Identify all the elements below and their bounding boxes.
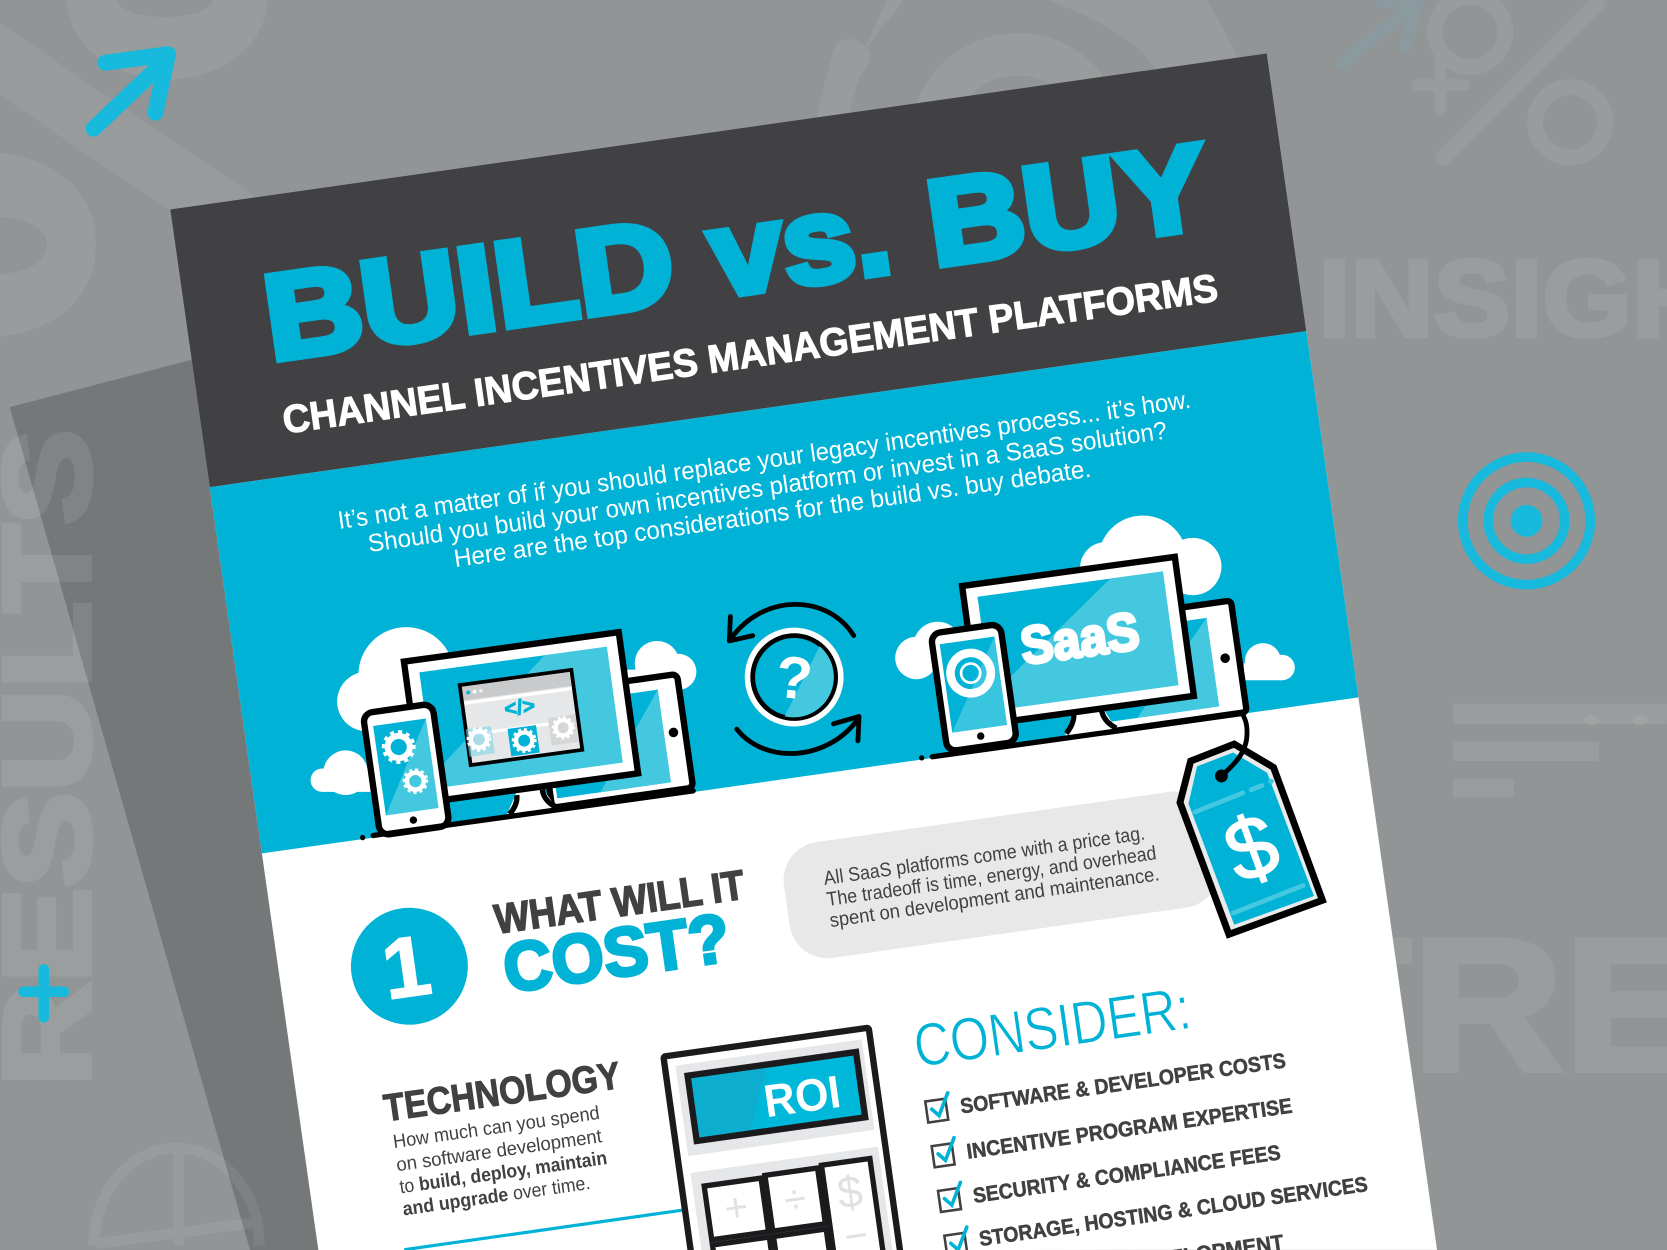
ring logo	[948, 650, 993, 696]
watermark: dial centre ring	[931, 54, 1103, 226]
intro text: It’s not a matter of if you should replace your legacy incentives process... it’s how.	[336, 386, 1192, 535]
watermark: ring top left	[67, 0, 267, 80]
shadow page	[10, 359, 330, 1250]
icon: blue target	[1463, 457, 1590, 585]
subtitle: CHANNEL INCENTIVES MANAGEMENT PLATFORMS	[280, 266, 1221, 442]
calculator display	[688, 1052, 865, 1141]
watermark: dial strap top centre	[813, 0, 904, 138]
button symbols	[721, 1167, 872, 1250]
calculator buttons	[704, 1158, 897, 1250]
title	[256, 117, 1217, 386]
icon: price tag	[1180, 712, 1322, 934]
number badge	[343, 900, 476, 1032]
watermark: large O left	[0, 152, 96, 338]
illustration: right tablet	[1086, 600, 1247, 733]
panel: infographic page	[170, 53, 1437, 1250]
illustration: left monitor	[404, 632, 638, 803]
divider line	[404, 1210, 683, 1250]
checklist: STORAGE, HOSTING & CLOUD SERVICES	[978, 1172, 1369, 1250]
watermark: percent icon	[1417, 0, 1605, 157]
checklist: SOFTWARE & DEVELOPER COSTS	[959, 1048, 1287, 1118]
callout text	[822, 821, 1161, 932]
technology text: How much can you spend	[392, 1103, 601, 1153]
technology text: to build, deploy, maintain	[398, 1148, 608, 1198]
watermark: text lines	[1453, 704, 1667, 797]
illustration: right phone	[931, 624, 1017, 752]
callout bubble	[779, 786, 1224, 963]
watermark: TRENDS: TRE	[1283, 900, 1667, 1111]
title: BUY	[919, 117, 1217, 292]
button symbols: ÷	[781, 1175, 809, 1223]
blue band	[210, 331, 1358, 853]
intro text: Here are the top considerations for the build vs. buy debate.	[452, 455, 1093, 573]
illustration: left ground line	[360, 791, 693, 840]
code window: </>	[503, 693, 536, 721]
callout text: All SaaS platforms come with a price tag.	[822, 822, 1146, 890]
button symbols: $	[834, 1167, 866, 1219]
intro text: Should you build your own incentives platform or invest in a SaaS solution?	[366, 417, 1169, 558]
checklist: INCENTIVE PROGRAM EXPERTISE	[965, 1094, 1294, 1164]
illustration: left phone	[363, 704, 450, 836]
page sheet	[170, 53, 1437, 1250]
technology text: on software development	[395, 1126, 604, 1176]
watermark: faint arrow	[1342, 0, 1418, 64]
illustration: ROI calculator	[663, 1028, 913, 1250]
icon: question mark	[748, 631, 840, 723]
intro text	[336, 386, 1200, 589]
heading: what will it cost	[491, 861, 757, 1008]
arrow: top rotate	[729, 604, 854, 641]
arrow: bottom rotate	[737, 716, 859, 754]
calculator display: ROI	[761, 1066, 844, 1127]
code window	[460, 670, 582, 765]
icon: question mark: ?	[773, 643, 816, 713]
heading: technology: TECHNOLOGY	[381, 1054, 623, 1130]
title: vs.	[701, 163, 899, 323]
heading: what will it cost: COST?	[498, 898, 734, 1007]
illustration: left clouds	[311, 627, 696, 795]
illustration: right clouds	[895, 516, 1295, 680]
icon: blue plus	[24, 969, 64, 1017]
check boxes	[925, 1093, 971, 1250]
illustration: right monitor	[962, 557, 1194, 725]
icon: price tag: $	[1212, 795, 1291, 902]
illustration: right monitor stand	[1065, 706, 1116, 736]
background diagonal band	[0, 23, 255, 210]
SaaS label: SaaS	[1017, 602, 1143, 676]
illustration: right ground line	[919, 713, 1244, 761]
checklist	[959, 1039, 1376, 1250]
icon: blue arrow	[94, 54, 168, 129]
heading: what will it cost: WHAT WILL IT	[491, 861, 747, 943]
illustration: left monitor stand	[506, 788, 557, 816]
watermark: pie chart	[94, 1148, 260, 1246]
callout text: spent on development and maintenance.	[828, 863, 1161, 932]
number badge: 1	[376, 918, 437, 1018]
checklist: SECURITY & COMPLIANCE FEES	[971, 1140, 1282, 1208]
callout text: The tradeoff is time, energy, and overhead	[825, 842, 1158, 911]
technology text	[392, 1103, 612, 1220]
header band	[170, 53, 1306, 487]
technology text: and upgrade over time.	[401, 1173, 592, 1220]
title: BUILD	[256, 194, 682, 386]
button symbols: +	[721, 1183, 751, 1232]
heading: consider: CONSIDER:	[909, 974, 1195, 1080]
illustration: left tablet	[536, 674, 693, 808]
watermark: dial outer arc	[1047, 0, 1246, 128]
